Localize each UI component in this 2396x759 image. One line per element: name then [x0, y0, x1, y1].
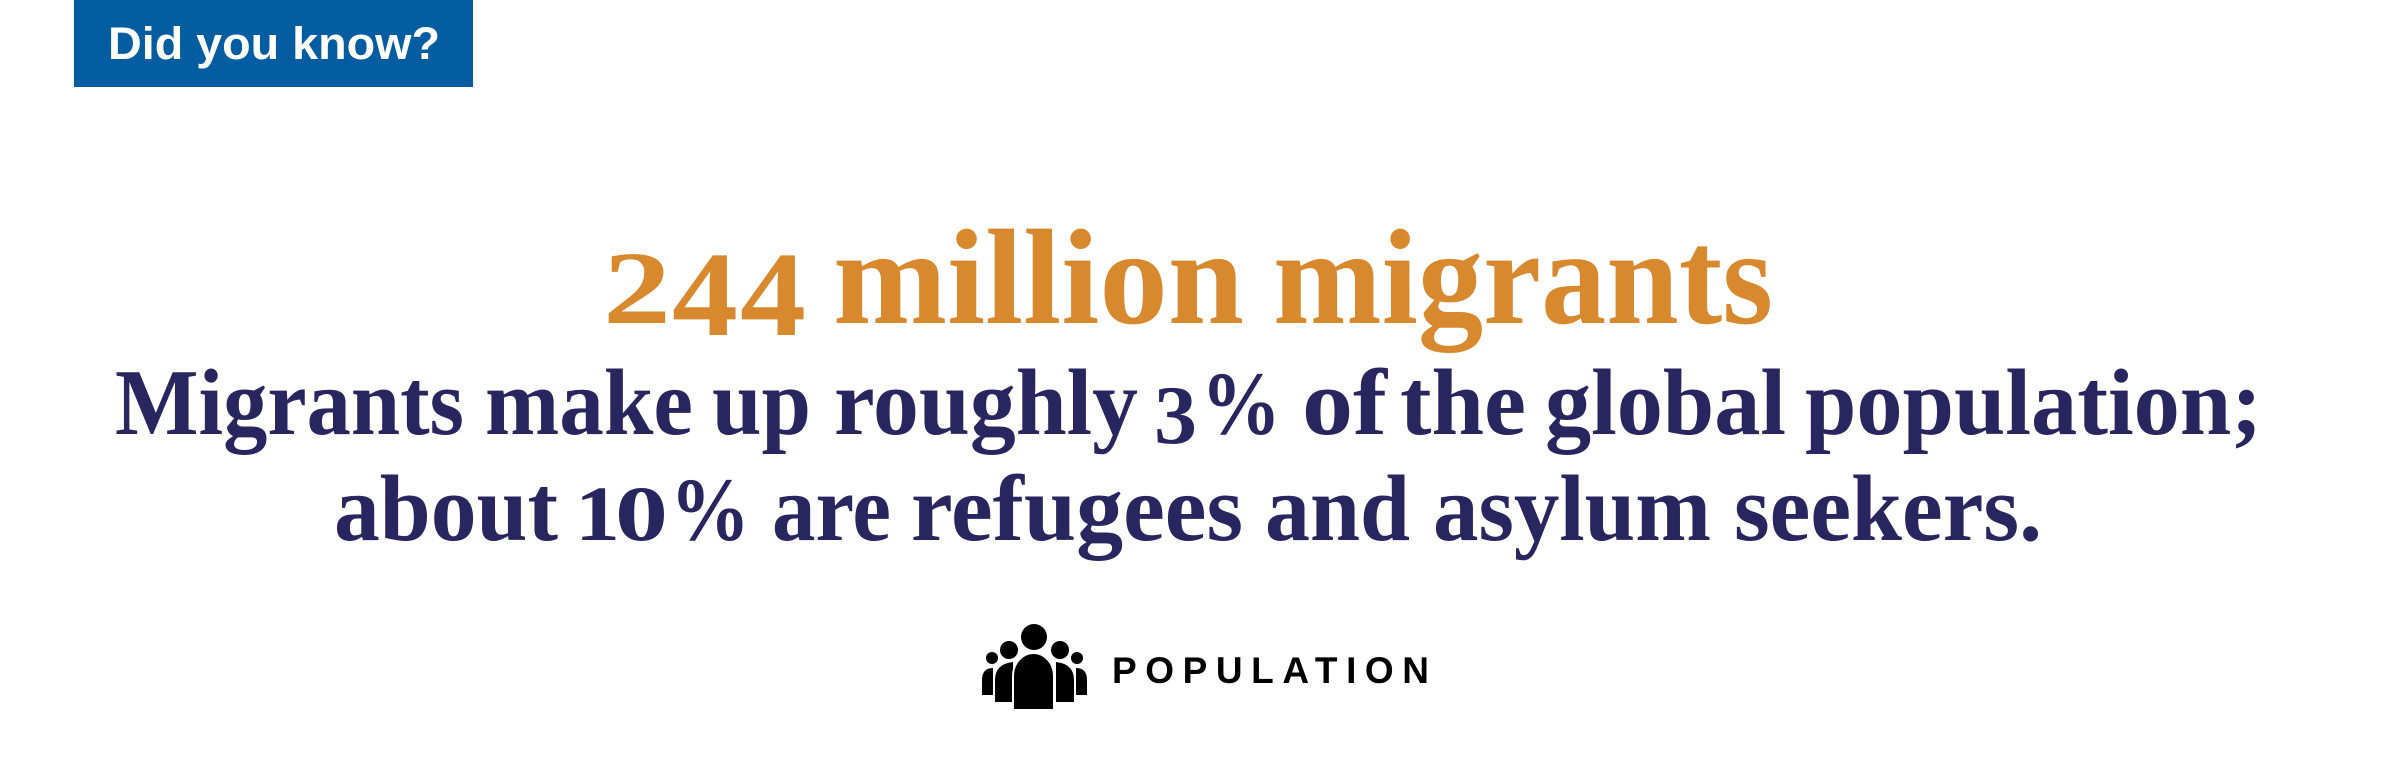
- statement text: asylum: [1433, 457, 1711, 561]
- statement text: [115, 351, 2262, 561]
- headline: 244 million migrants: [603, 203, 1773, 362]
- headline: 244 million migrants: 4: [672, 228, 738, 362]
- banner: did you know: [74, 0, 473, 87]
- icon: population group: [982, 624, 1087, 710]
- statement text: refugees: [911, 457, 1243, 561]
- statement text: population;: [1805, 351, 2262, 455]
- statement text: seekers.: [1734, 457, 2042, 561]
- headline: 244 million migrants: 4: [740, 228, 806, 362]
- headline: 244 million migrants: 2: [603, 231, 671, 346]
- statement text: of: [1302, 351, 1389, 455]
- banner: did you know: Did you know?: [108, 18, 440, 69]
- statement text: up: [712, 351, 811, 455]
- statement text: 1: [575, 470, 620, 557]
- label: population: POPULATION: [1112, 650, 1429, 691]
- headline: 244 million migrants: million: [833, 203, 1244, 353]
- statement text: about: [334, 457, 558, 561]
- statement text: %: [670, 461, 750, 560]
- statement text: the: [1400, 351, 1526, 455]
- statement text: Migrants: [115, 351, 464, 455]
- statement text: and: [1265, 457, 1410, 561]
- headline: 244 million migrants: migrants: [1273, 203, 1773, 353]
- statement text: global: [1545, 351, 1786, 455]
- statement text: %: [1201, 355, 1281, 454]
- statement text: 0: [615, 470, 668, 557]
- statement text: 3: [1154, 369, 1197, 462]
- statement text: make: [485, 351, 693, 455]
- statement text: are: [772, 457, 891, 561]
- statement text: roughly: [834, 351, 1138, 455]
